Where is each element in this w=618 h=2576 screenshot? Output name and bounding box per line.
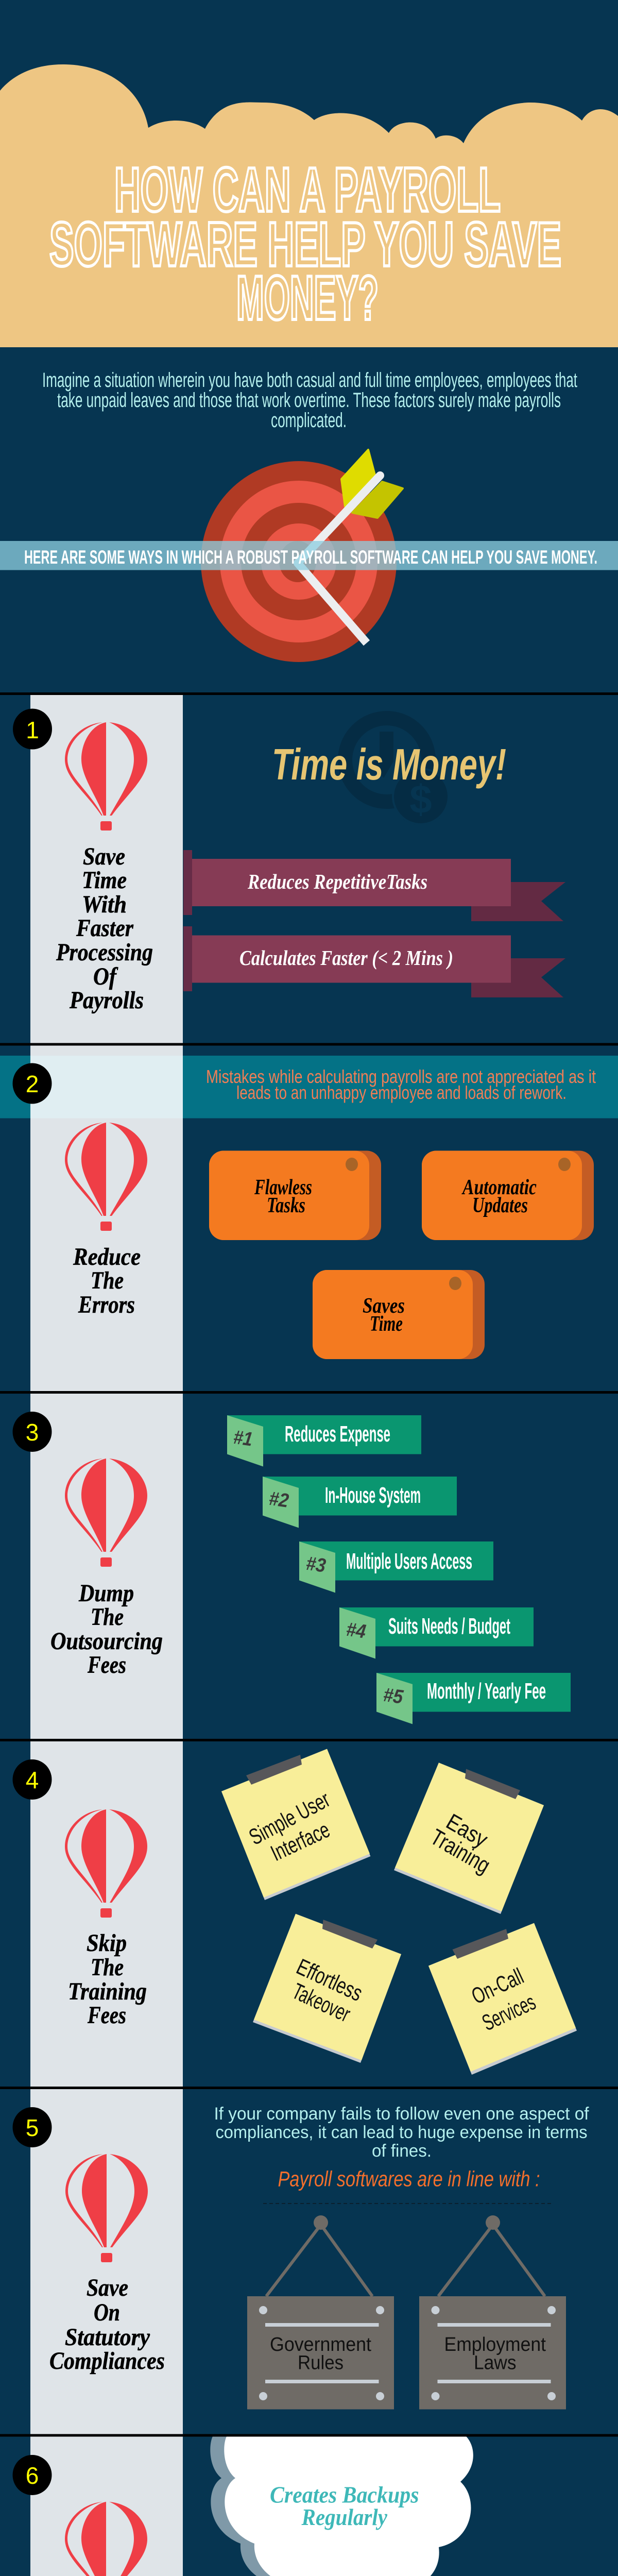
section 2 title: The [91, 1267, 124, 1294]
section 2 title: Errors [78, 1291, 135, 1318]
section 1 title: Faster [76, 914, 134, 942]
number badge 5 [12, 2107, 52, 2147]
section 5 title: On [94, 2299, 120, 2326]
sticky note: easy training: Training [426, 1824, 494, 1878]
section 4 title: Skip [87, 1929, 127, 1957]
step 3: #3 [305, 1553, 327, 1577]
step 1 [227, 1415, 421, 1466]
header cloud panel [0, 64, 618, 347]
ribbon: reduces repetitive tasks: Reduces RepetitiveTasks [247, 870, 427, 893]
icon: clock and dollar watermark [345, 718, 450, 825]
compliance text [214, 2104, 589, 2161]
icon: target with arrow [201, 450, 403, 662]
icon: clock and dollar watermark: $ [409, 776, 432, 822]
card: automatic updates: Automatic [461, 1176, 537, 1199]
title [49, 155, 561, 333]
step 4 [339, 1607, 534, 1659]
left column panel [30, 695, 183, 2576]
number badge 5: 5 [26, 2114, 39, 2141]
section 3 title [50, 1580, 163, 1679]
section 4 title [68, 1929, 147, 2029]
section 3 title: Outsourcing [50, 1628, 163, 1655]
ribbon: reduces repetitive tasks [183, 850, 565, 921]
teal text band [0, 1056, 618, 1118]
section 5 title: Compliances [49, 2347, 165, 2375]
card: saves time [313, 1270, 485, 1359]
sign: employment laws [419, 2215, 566, 2409]
icon: balloon 4 [65, 1809, 147, 1918]
number badge 4: 4 [26, 1767, 39, 1793]
sticky note: easy training [394, 1762, 544, 1914]
step 3: Multiple Users Access [346, 1549, 472, 1574]
number badge 6 [12, 2455, 52, 2495]
step 2 [263, 1477, 457, 1528]
sticky note: simple user interface: Simple User [245, 1787, 334, 1850]
compliance text: of fines. [372, 2141, 432, 2161]
sticky note: on-call services [428, 1923, 577, 2075]
step 2: #2 [268, 1488, 290, 1512]
sign: government rules: Rules [298, 2352, 344, 2374]
section 5 title: Statutory [65, 2324, 150, 2351]
card: automatic updates [422, 1151, 594, 1240]
section 4 title: Fees [87, 2002, 126, 2029]
section 2 title: Reduce [73, 1243, 141, 1270]
card: flawless tasks: Flawless [254, 1176, 312, 1199]
icon: balloon 6 [65, 2502, 147, 2576]
title: MONEY? [236, 263, 379, 333]
card: saves time: Saves [363, 1294, 405, 1318]
panel: section 4 [65, 1749, 577, 2075]
section 3 title: Fees [87, 1651, 126, 1679]
cloud: creates backups [210, 2436, 473, 2576]
compliance text: compliances, it can lead to huge expense in terms [215, 2123, 587, 2142]
icon: balloon 5 [65, 2154, 148, 2262]
section 4 title: Training [68, 1978, 147, 2005]
number badge 3: 3 [26, 1419, 39, 1446]
number badge 1: 1 [26, 717, 39, 743]
sticky note: on-call services: Services [478, 1989, 540, 2036]
card: automatic updates: Updates [472, 1194, 528, 1217]
step 5: #5 [382, 1684, 405, 1708]
section 2 title [73, 1243, 141, 1318]
panel: section 6 [65, 2436, 590, 2576]
sign: government rules [247, 2215, 394, 2409]
sign: government rules: Government [270, 2334, 371, 2355]
section 3 title: The [91, 1603, 124, 1631]
sticky note: on-call services: On-Call [468, 1963, 527, 2009]
sticky note: effortless takeover [253, 1914, 401, 2063]
step 1: #1 [232, 1427, 254, 1451]
icon: balloon 1 [65, 722, 147, 831]
panel: section 2 [0, 1056, 618, 1359]
ribbon: calculates faster: Calculates Faster (< 2 Mins ) [239, 946, 453, 970]
card: saves time: Time [370, 1312, 403, 1336]
step 2: In-House System [325, 1483, 421, 1508]
icon: balloon 2 [65, 1123, 147, 1231]
section 1 title: Payrolls [69, 987, 144, 1014]
step 5 [376, 1673, 571, 1724]
panel: section 1 [56, 718, 565, 1014]
section 1 title: With [82, 891, 127, 918]
number badge 6: 6 [26, 2462, 39, 2489]
sign: employment laws: Employment [444, 2334, 546, 2355]
sign: employment laws: Laws [474, 2352, 516, 2374]
heading: time is money: Time is Money! [272, 740, 506, 789]
section 3 title: Dump [78, 1580, 134, 1607]
card: flawless tasks: Tasks [267, 1194, 305, 1217]
sticky note: effortless takeover: Takeover [288, 1978, 354, 2027]
step 4: Suits Needs / Budget [388, 1614, 510, 1639]
cloud: creates backups: Regularly [301, 2504, 388, 2530]
section dividers [0, 692, 618, 2437]
intro text [42, 369, 577, 432]
section 1 title [56, 843, 153, 1014]
number badge 2: 2 [26, 1071, 39, 1097]
number badge 1 [13, 709, 52, 749]
section 1 title: Save [83, 843, 125, 870]
sticky note: simple user interface: Interface [267, 1817, 334, 1866]
sticky note: easy training: Easy [442, 1809, 492, 1853]
cloud: creates backups: Creates Backups [270, 2481, 419, 2508]
step 4: #4 [345, 1619, 367, 1643]
panel: section 3 [50, 1415, 571, 1724]
section 5 title: Save [87, 2274, 128, 2301]
callout banner [0, 541, 618, 570]
section 1 title: Time [82, 867, 127, 894]
number badge 2 [12, 1063, 52, 1104]
ribbon: calculates faster [183, 926, 565, 997]
card: flawless tasks [209, 1151, 381, 1240]
section 5 title [49, 2274, 165, 2375]
sticky note: effortless takeover: Effortless [293, 1954, 366, 2006]
step 1: Reduces Expense [285, 1421, 390, 1447]
section 1 title: Processing [56, 939, 153, 966]
number badge 3 [12, 1412, 52, 1452]
number badge 4 [12, 1759, 52, 1800]
section 4 title: The [91, 1954, 124, 1981]
icon: balloon 3 [65, 1459, 147, 1567]
compliance text: If your company fails to follow even one aspect of [214, 2104, 589, 2124]
panel: section 5 [49, 2104, 589, 2409]
section 1 title: Of [93, 963, 118, 990]
sticky note: simple user interface [221, 1749, 370, 1900]
intro text: complicated. [271, 409, 347, 432]
orange subheading: Payroll softwares are in line with : [278, 2167, 540, 2191]
step 3 [299, 1541, 493, 1593]
